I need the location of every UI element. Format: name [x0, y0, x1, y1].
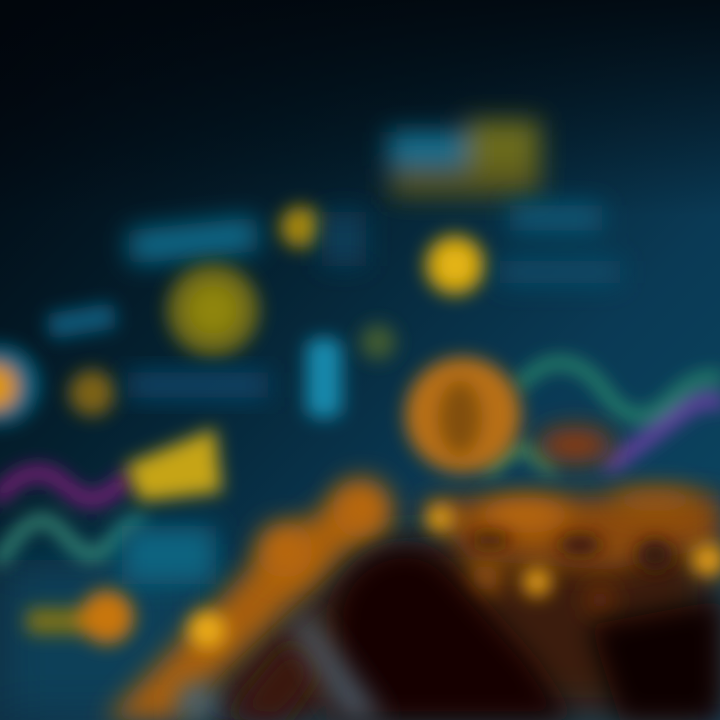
left label bar — [46, 302, 118, 340]
small gold dot — [280, 206, 322, 248]
coin pile — [105, 427, 720, 720]
faint text near dot — [322, 212, 366, 266]
yellow arrow shape — [125, 428, 222, 502]
large gold coin — [167, 264, 259, 356]
dim olive dot — [360, 324, 396, 360]
teal label bar — [127, 217, 260, 264]
large orange coin — [405, 357, 521, 473]
dark foreground finger — [225, 549, 720, 720]
top label box — [388, 120, 540, 196]
right faint labels — [500, 205, 620, 284]
bright gold coin — [425, 235, 485, 295]
bottom-left coin and label — [26, 590, 134, 644]
dim orange dot — [69, 370, 115, 416]
orange ridge band — [105, 490, 720, 720]
right wave lines — [490, 362, 720, 470]
grey highlight strips — [180, 615, 385, 720]
dark gaps between coins — [468, 533, 673, 571]
cyan vertical bar — [306, 338, 342, 418]
bright gold highlights — [188, 504, 720, 649]
left edge coin — [0, 345, 40, 425]
dim text bar — [128, 372, 268, 398]
orange coin ridge — [257, 427, 700, 613]
dark pile mass — [170, 520, 720, 720]
left wave lines — [0, 473, 140, 560]
blue box — [122, 526, 216, 584]
